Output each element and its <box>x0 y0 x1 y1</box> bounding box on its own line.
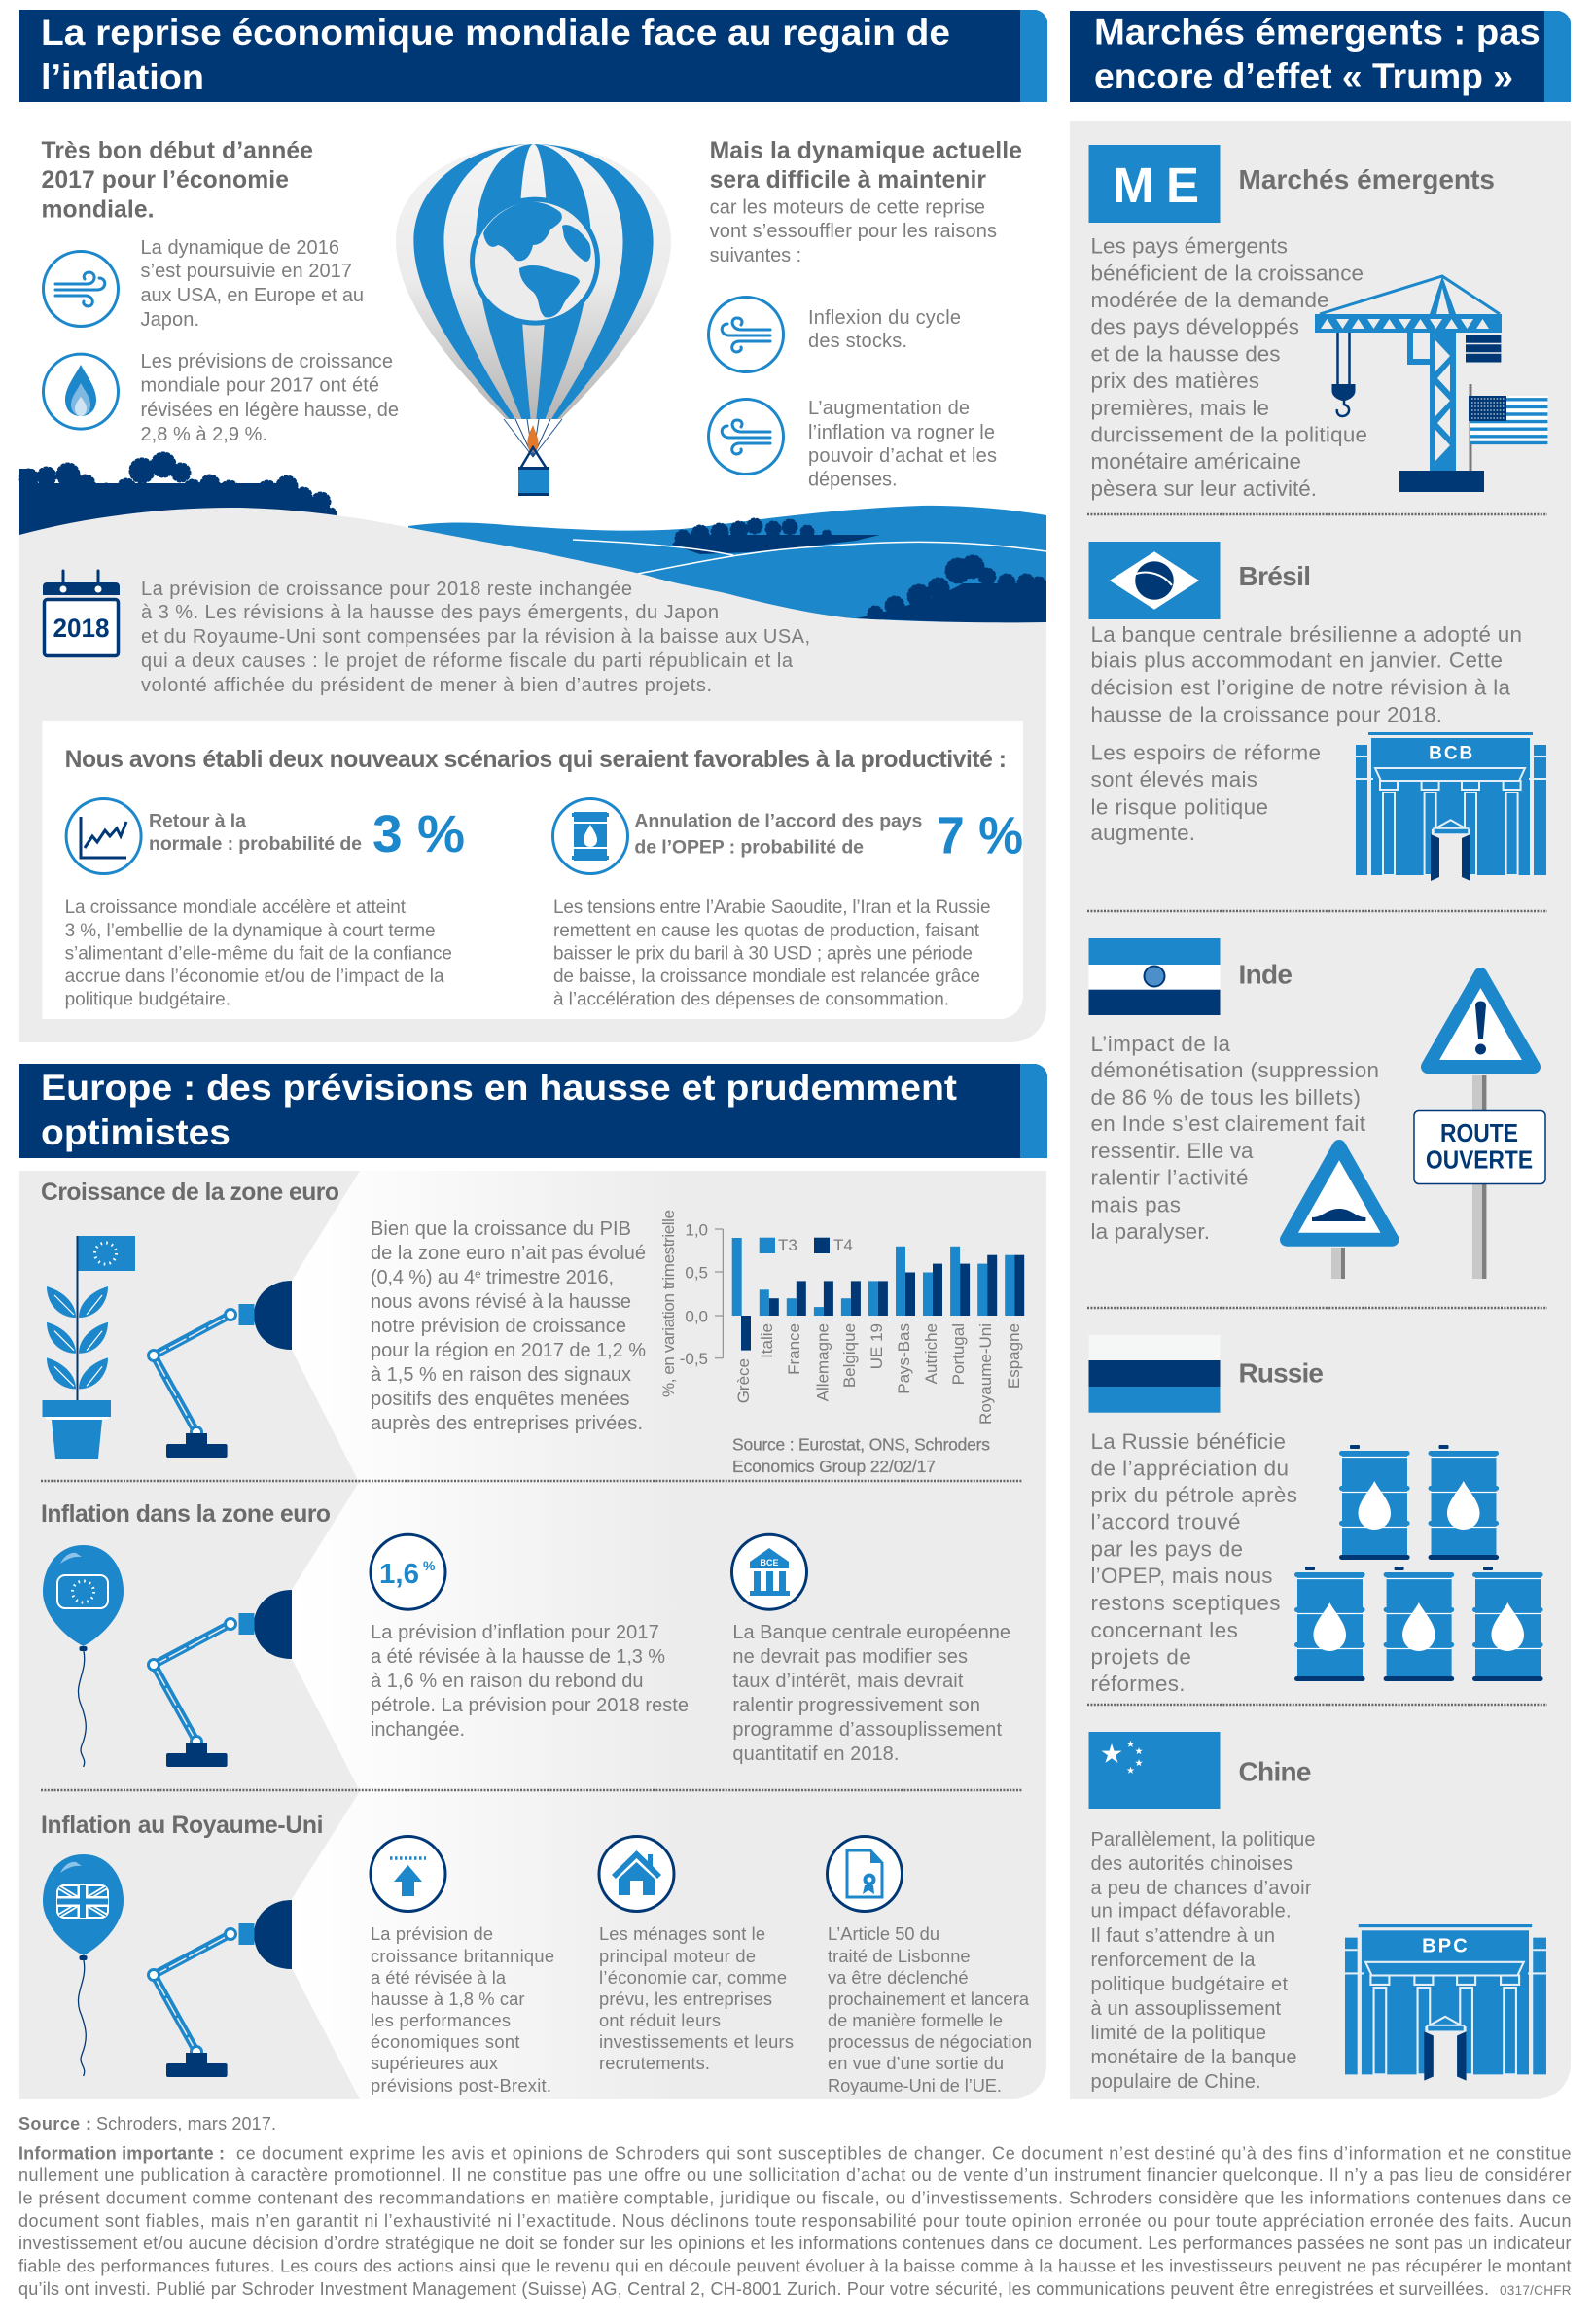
text: pays émergents: prix des matières <box>1091 369 1259 393</box>
text: banque centrale européenne: ralentir progressivement son <box>732 1695 980 1716</box>
sign: warning and route ouverte: OUVERTE <box>1426 1145 1533 1175</box>
text: ménages: l’économie car, comme <box>599 1967 787 1988</box>
heading: mais la dynamique actuelle: vont s’essouffler pour les raisons <box>710 221 997 242</box>
text: inflexion du cycle: des stocks. <box>808 331 907 352</box>
text: banque centrale européenne: quantitatif en 2018. <box>732 1743 899 1765</box>
text: pays émergents: modérée de la demande <box>1091 288 1328 312</box>
text: pays émergents: premières, mais le <box>1091 396 1269 420</box>
text: Chine: populaire de Chine. <box>1091 2071 1260 2093</box>
text: retour à la normale <box>149 811 362 855</box>
text: Chine <box>1091 1829 1315 2093</box>
text: prévision d'inflation: pétrole. La prévision pour 2018 reste <box>371 1695 689 1716</box>
text: Russie: projets de <box>1091 1645 1191 1670</box>
bar chart: croissance T3 T4: T3 <box>778 1236 797 1254</box>
text: ménages: ont réduit leurs <box>599 2010 721 2030</box>
text: prévisions de croissance: mondiale pour 2017 ont été <box>140 375 379 397</box>
panel: Europe <box>19 1171 1046 2099</box>
flag: Brazil <box>1089 542 1220 619</box>
title banner: Europe <box>19 1064 1047 1158</box>
legal notice <box>18 2144 1572 2299</box>
text: banque centrale brésilienne <box>1091 622 1522 726</box>
icon: wind inflation <box>708 399 784 475</box>
figure: 3 %: 3 % <box>372 805 465 863</box>
bar chart: croissance T3 T4: -0,5 <box>680 1350 708 1368</box>
text: démonétisation: démonétisation (suppression <box>1091 1058 1379 1082</box>
text: pays émergents: pèsera sur leur activité. <box>1091 476 1317 501</box>
text: Russie: l’OPEP, mais nous <box>1091 1564 1272 1588</box>
text: banque centrale européenne: ne devrait pas modifier ses <box>732 1646 968 1668</box>
bar chart: croissance T3 T4: France <box>785 1323 803 1375</box>
icon: central bank BCB: BCB <box>1429 744 1474 764</box>
title banner: Europe: Europe : des prévisions en hausse et prudemment <box>41 1068 957 1108</box>
icon: 1,6 % <box>371 1534 445 1609</box>
heading: mais la dynamique actuelle: sera difficile à maintenir <box>710 167 986 194</box>
heading: inflation zone euro: Inflation dans la zone euro <box>41 1501 331 1528</box>
panel: marchés émergents <box>1070 121 1571 2099</box>
text: dynamique de 2016: La dynamique de 2016 <box>140 237 339 259</box>
text: Russie: restons sceptiques <box>1091 1591 1280 1615</box>
label: Russie: Russie <box>1239 1358 1324 1389</box>
title banner: reprise mondiale <box>19 10 1047 102</box>
intro heading: très bon début d'année: mondiale. <box>41 196 154 224</box>
text: prévisions de croissance: révisées en légère hausse, de <box>140 400 399 421</box>
chart source: Economics Group 22/02/17 <box>732 1457 936 1476</box>
text: Chine: Parallèlement, la politique <box>1091 1829 1315 1850</box>
icon: 1,6 %: % <box>423 1558 436 1573</box>
text: croissance PIB zone euro: e <box>475 1267 481 1281</box>
text: Russie: concernant les <box>1091 1618 1238 1642</box>
text: ménages <box>599 1923 794 2073</box>
icon: central bank BPC <box>1342 1924 1549 2081</box>
icon: BCE temple: BCE <box>760 1558 779 1567</box>
text: prévisions de croissance: Les prévisions de croissance <box>140 351 393 372</box>
text: espoirs de réforme: sont élevés mais <box>1091 767 1257 792</box>
text: Russie: prix du pétrole après <box>1091 1483 1297 1507</box>
bar chart: croissance T3 T4: Italie <box>758 1323 776 1358</box>
text: annulation accord OPEP <box>634 811 923 859</box>
icon: desk lamp <box>148 1590 292 1767</box>
text: Chine: des autorités chinoises <box>1091 1853 1293 1875</box>
text: article 50: traité de Lisbonne <box>828 1946 971 1966</box>
bar chart: croissance T3 T4: Allemagne <box>814 1323 832 1401</box>
legal notice: le présent document comme contenant des recommandations en matière comptable, juridique ou fiscale, ou d’investissements. Schroders considère que les informations contenues dans ce <box>18 2189 1572 2208</box>
text: article 50: de manière formelle le <box>828 2010 1003 2030</box>
icon: house <box>599 1836 674 1912</box>
flag: India <box>1089 938 1220 1015</box>
text: annulation accord OPEP: de l’OPEP : probabilité de <box>634 837 864 859</box>
text: démonétisation: mais pas <box>1091 1193 1181 1217</box>
text: prévision d'inflation: inchangée. <box>371 1719 465 1741</box>
text: prévision 2018: à 3 %. Les révisions à la hausse des pays émergents, du Japon <box>141 602 719 623</box>
text: scénario 1: politique budgétaire. <box>65 990 230 1010</box>
text: prévisions de croissance <box>140 351 399 445</box>
text: pays émergents: des pays développés <box>1091 315 1299 339</box>
text: espoirs de réforme <box>1091 741 1321 845</box>
panel: deux scénarios <box>43 721 1023 1019</box>
bar chart: croissance T3 T4: T4 <box>833 1236 853 1254</box>
icon: central bank BCB <box>1353 732 1549 881</box>
text: prévision 2018: volonté affichée du président de mener à bien d’autres projets. <box>141 675 712 696</box>
text: démonétisation: de 86 % de tous les billets) <box>1091 1085 1361 1109</box>
icon: wind stocks <box>708 298 784 371</box>
icon: crane with US flag <box>1315 276 1547 492</box>
icon: calendar 2018: 2018 <box>53 614 109 643</box>
figure: 7 %: 7 % <box>937 807 1023 865</box>
text: scénario 2: Les tensions entre l’Arabie Saoudite, l’Iran et la Russie <box>553 898 991 918</box>
text: espoirs de réforme: le risque politique <box>1091 795 1268 820</box>
text: retour à la normale: normale : probabilité de <box>149 833 362 855</box>
title banner: marchés émergents <box>1070 11 1571 102</box>
text: croissance PIB zone euro: nous avons révisé à la hausse <box>371 1291 631 1313</box>
heading: scénarios: Nous avons établi deux nouveaux scénarios qui seraient favorables à la productivité : <box>65 747 1007 773</box>
text: dynamique de 2016: aux USA, en Europe et au <box>140 285 364 306</box>
text: pays émergents: monétaire américaine <box>1091 449 1301 474</box>
text: scénario 2 <box>553 898 991 1010</box>
text: article 50: va être déclenché <box>828 1967 969 1988</box>
text: prévision britannique: supérieures aux <box>371 2053 498 2073</box>
text: croissance PIB zone euro: notre prévision de croissance <box>371 1316 626 1337</box>
chart source <box>732 1435 990 1476</box>
text: banque centrale brésilienne: biais plus accommodant en janvier. Cette <box>1091 649 1503 673</box>
text: prévision d'inflation: a été révisée à la hausse de 1,3 % <box>371 1646 665 1668</box>
title banner: marchés émergents: Marchés émergents : pas <box>1094 13 1541 53</box>
text: annulation accord OPEP: Annulation de l’accord des pays <box>634 811 923 832</box>
text: démonétisation: ralentir l’activité <box>1091 1166 1249 1190</box>
tag: ME: M E <box>1113 158 1199 213</box>
icon: BCE temple <box>731 1534 807 1609</box>
text: augmentation de l'inflation: dépenses. <box>808 469 897 490</box>
text: Chine: a peu de chances d’avoir <box>1091 1878 1312 1899</box>
text: prévision britannique: croissance britannique <box>371 1946 554 1966</box>
text: Russie <box>1091 1429 1297 1696</box>
icon: UK balloon <box>43 1854 124 2076</box>
text: pays émergents: bénéficient de la croissance <box>1091 262 1364 286</box>
text: retour à la normale: Retour à la <box>149 811 246 832</box>
bar chart: croissance T3 T4: Portugal <box>949 1323 968 1385</box>
text: ménages: Les ménages sont le <box>599 1923 765 1944</box>
text: article 50: en vue d’une sortie du <box>828 2053 1004 2073</box>
text: croissance PIB zone euro: (0,4 %) au 4 <box>371 1267 475 1288</box>
text: ménages: prévu, les entreprises <box>599 1989 772 2009</box>
text: augmentation de l'inflation: L’augmentation de <box>808 398 970 419</box>
text: démonétisation: en Inde s’est clairement fait <box>1091 1111 1366 1136</box>
legal notice: fiable des performances futures. Les cours des actions ainsi que le revenu qui en découle peuvent évoluer à la baisse comme à la hausse et les investisseurs peuvent ne pas récupérer le montant <box>18 2257 1572 2276</box>
text: Russie: réformes. <box>1091 1672 1185 1696</box>
text: espoirs de réforme: augmente. <box>1091 821 1195 845</box>
icon: calendar 2018 <box>43 571 120 655</box>
heading: mais la dynamique actuelle: suivantes : <box>710 245 801 266</box>
bar chart: croissance T3 T4: Royaume-Uni <box>976 1323 995 1425</box>
flag: Russia <box>1089 1335 1220 1413</box>
heading: mais la dynamique actuelle: car les moteurs de cette reprise <box>710 196 985 218</box>
sign: warning and route ouverte <box>1414 974 1545 1279</box>
text: démonétisation <box>1091 1032 1379 1244</box>
text: scénario 1: accrue dans l’économie et/ou de l’impact de la <box>65 967 444 987</box>
sign: warning and route ouverte: ROUTE <box>1440 1118 1518 1147</box>
bar chart: croissance T3 T4: Espagne <box>1005 1323 1023 1389</box>
bar chart: croissance T3 T4: UE 19 <box>868 1323 886 1369</box>
text: Russie: La Russie bénéficie <box>1091 1429 1286 1454</box>
bar chart: croissance T3 T4: Grèce <box>734 1358 753 1403</box>
text: pays émergents: Les pays émergents <box>1091 234 1288 259</box>
icon: wind <box>43 251 119 327</box>
text: Chine: limité de la politique <box>1091 2023 1266 2044</box>
text: dynamique de 2016: Japon. <box>140 309 199 331</box>
text: augmentation de l'inflation: l’inflation va rogner le <box>808 422 995 443</box>
title banner: reprise mondiale: La reprise économique mondiale face au regain de <box>41 13 950 53</box>
icon: desk lamp <box>148 1900 292 2077</box>
text: scénario 1: s’alimentant d’elle-même du fait de la confiance <box>65 944 452 965</box>
landscape: trees and hills <box>19 453 1052 1042</box>
source <box>18 2114 276 2133</box>
heading: mais la dynamique actuelle <box>710 138 1022 266</box>
source: Source : <box>18 2114 91 2133</box>
text: prévision 2018: et du Royaume-Uni sont compensées par la révision à la baisse aux USA, <box>141 626 810 648</box>
legal notice: 0317/CHFR <box>1500 2283 1572 2298</box>
text: inflexion du cycle: Inflexion du cycle <box>808 307 961 329</box>
text: dynamique de 2016 <box>140 237 364 331</box>
text: banque centrale brésilienne: hausse de la croissance pour 2018. <box>1091 702 1442 726</box>
text: croissance PIB zone euro: auprès des entreprises privées. <box>371 1413 643 1434</box>
flag: China <box>1089 1732 1220 1809</box>
icon: five oil barrels <box>1294 1445 1543 1681</box>
label: marchés émergents: Marchés émergents <box>1239 164 1495 194</box>
bar chart: croissance T3 T4: Pays-Bas <box>895 1323 913 1394</box>
bar chart: croissance T3 T4: 0,0 <box>685 1307 708 1326</box>
text: démonétisation: la paralyser. <box>1091 1219 1210 1244</box>
legal notice: investissement et/ou aucune décision d’ordre stratégique ne doit se fonder sur les opinions et les informations contenues dans ce document. Les performances passées ne sont pas un indicateur <box>18 2234 1572 2253</box>
text: banque centrale européenne: La Banque centrale européenne <box>732 1622 1010 1643</box>
text: article 50: L’Article 50 du <box>828 1923 939 1944</box>
text: augmentation de l'inflation: pouvoir d’achat et les <box>808 445 997 467</box>
text: banque centrale brésilienne: décision est l’origine de notre révision à la <box>1091 676 1511 700</box>
text: croissance PIB zone euro: à 1,5 % en raison des signaux <box>371 1364 631 1386</box>
text: Chine: à un assouplissement <box>1091 1998 1281 2020</box>
text: prévision 2018: La prévision de croissance pour 2018 reste inchangée <box>141 579 632 600</box>
legal notice: ce document exprime les avis et opinions de Schroders qui sont susceptibles de changer. Ce document n’est destiné qu’à des fins d’information et ne constitue <box>236 2144 1572 2164</box>
text: prévisions de croissance: 2,8 % à 2,9 %. <box>140 424 267 445</box>
text: pays émergents: durcissement de la politique <box>1091 423 1367 447</box>
text: scénario 2: remettent en cause les quotas de production, faisant <box>553 921 980 941</box>
heading: inflation Royaume-Uni: Inflation au Royaume-Uni <box>41 1813 323 1839</box>
text: Russie: par les pays de <box>1091 1537 1243 1562</box>
legal notice: nullement une publication à caractère promotionnel. Il ne constitue pas une offre ou une sollicitation d’achat ou de vente d’un instrument financier quelconque. Il n’y a pas lieu de considérer <box>18 2166 1572 2185</box>
text: prévision 2018 <box>141 579 810 696</box>
text: Chine: un impact défavorable. <box>1091 1901 1292 1922</box>
text: démonétisation: ressentir. Elle va <box>1091 1139 1254 1163</box>
intro heading: très bon début d'année: 2017 pour l’économie <box>41 167 289 194</box>
text: article 50: prochainement et lancera <box>828 1989 1030 2009</box>
icon: barrel <box>552 799 628 873</box>
heading: mais la dynamique actuelle: Mais la dynamique actuelle <box>710 138 1022 164</box>
text: Chine: politique budgétaire et <box>1091 1974 1288 1995</box>
text: scénario 1: La croissance mondiale accélère et atteint <box>65 898 407 918</box>
text: pays émergents <box>1091 234 1367 501</box>
text: banque centrale européenne: taux d’intérêt, mais devrait <box>732 1671 964 1692</box>
text: prévision 2018: qui a deux causes : le projet de réforme fiscale du parti républicain et la <box>141 651 794 672</box>
title banner: reprise mondiale: l’inflation <box>41 57 204 97</box>
bar chart: croissance T3 T4: 0,5 <box>685 1264 708 1282</box>
label: Chine: Chine <box>1239 1757 1311 1787</box>
text: prévision britannique: hausse à 1,8 % car <box>371 1989 525 2009</box>
text: scénario 1 <box>65 898 452 1010</box>
sign: speed bump <box>1287 1146 1393 1279</box>
tag: ME <box>1089 145 1220 223</box>
icon: document with seal <box>827 1836 903 1912</box>
text: scénario 2: de baisse, la croissance mondiale est relancée grâce <box>553 967 980 987</box>
bar chart: croissance T3 T4: Belgique <box>840 1323 859 1388</box>
text: espoirs de réforme: Les espoirs de réforme <box>1091 741 1321 765</box>
title banner: marchés émergents: encore d’effet « Trump » <box>1094 56 1513 96</box>
text: Chine: Il faut s’attendre à un <box>1091 1925 1275 1947</box>
text: prévision britannique: a été révisée à la <box>371 1967 507 1988</box>
text: inflexion du cycle <box>808 307 961 352</box>
hot air balloon with globe <box>396 144 671 496</box>
text: ménages: principal moteur de <box>599 1946 756 1966</box>
text: article 50: processus de négociation <box>828 2031 1032 2052</box>
bar chart: croissance T3 T4 <box>659 1210 1024 1425</box>
text: croissance PIB zone euro: Bien que la croissance du PIB <box>371 1218 631 1240</box>
bar chart: croissance T3 T4: Autriche <box>922 1323 940 1384</box>
text: prévision britannique: La prévision de <box>371 1923 493 1944</box>
text: prévision d'inflation: à 1,6 % en raison du rebond du <box>371 1671 644 1692</box>
text: banque centrale brésilienne: La banque centrale brésilienne a adopté un <box>1091 622 1522 647</box>
icon: 1,6 %: 1,6 <box>379 1559 419 1590</box>
icon: flame <box>43 354 119 429</box>
icon: desk lamp <box>148 1281 292 1458</box>
text: prévision britannique <box>371 1923 554 2095</box>
text: pays émergents: et de la hausse des <box>1091 341 1280 366</box>
icon: up arrow <box>371 1836 445 1912</box>
text: augmentation de l'inflation <box>808 398 997 490</box>
text: prévision britannique: les performances <box>371 2010 511 2030</box>
chart source: Source : Eurostat, ONS, Schroders <box>732 1435 990 1455</box>
text: article 50: Royaume-Uni de l’UE. <box>828 2075 1002 2095</box>
text: scénario 1: 3 %, l’embellie de la dynamique à court terme <box>65 921 436 941</box>
label: Inde: Inde <box>1239 960 1293 990</box>
text: prévision britannique: économiques sont <box>371 2031 519 2052</box>
text: croissance PIB zone euro: de la zone euro n’ait pas évolué <box>371 1243 646 1264</box>
text: croissance PIB zone euro: positifs des enquêtes menées <box>371 1389 630 1410</box>
text: démonétisation: L’impact de la <box>1091 1032 1231 1056</box>
text: croissance PIB zone euro: trimestre 2016, <box>481 1267 614 1288</box>
text: scénario 2: baisser le prix du baril à 30 USD ; après une période <box>553 944 973 965</box>
text: croissance PIB zone euro: pour la région en 2017 de 1,2 % <box>371 1340 646 1361</box>
intro heading: très bon début d'année: Très bon début d’année <box>41 138 313 164</box>
icon: plant with EU flag in pot <box>43 1236 135 1459</box>
legal notice: qu’ils ont investi. Publié par Schroder Investment Management (Suisse) AG, Central 2, CH-8001 Zurich. Pour votre sécurité, les communications peuvent être enregistrées et surveillées. <box>18 2279 1489 2299</box>
text: prévision d'inflation: La prévision d’inflation pour 2017 <box>371 1622 659 1643</box>
icon: central bank BPC: BPC <box>1422 1935 1470 1956</box>
text: ménages: investissements et leurs <box>599 2031 794 2052</box>
text: dynamique de 2016: s’est poursuivie en 2017 <box>140 261 352 282</box>
title banner: Europe: optimistes <box>41 1112 230 1152</box>
text: banque centrale européenne: programme d’assouplissement <box>732 1719 1002 1741</box>
text: Russie: de l’appréciation du <box>1091 1457 1289 1481</box>
label: Brésil: Brésil <box>1239 561 1311 591</box>
text: Russie: l’accord trouvé <box>1091 1510 1241 1534</box>
text: scénario 2: à l’accélération des dépenses de consommation. <box>553 990 949 1010</box>
intro heading: très bon début d'année <box>41 138 313 224</box>
icon: line chart <box>66 799 141 873</box>
legal notice: document sont fiables, mais n’en garantit ni l’exhaustivité ni l’exactitude. Nous déclinons toute responsabilité pour toute opinion erronée ou pour toute appréciation erronée des faits. Aucun <box>18 2211 1572 2231</box>
heading: croissance de la zone euro: Croissance de la zone euro <box>41 1180 339 1206</box>
bar chart: croissance T3 T4: 1,0 <box>685 1221 708 1239</box>
text: Chine: renforcement de la <box>1091 1950 1256 1971</box>
text: prévision britannique: prévisions post-Brexit. <box>371 2075 551 2095</box>
text: prévision d'inflation <box>371 1622 689 1741</box>
source: Schroders, mars 2017. <box>96 2114 276 2133</box>
text: banque centrale européenne <box>732 1622 1010 1765</box>
icon: EU balloon <box>43 1545 124 1767</box>
legal notice: Information importante : <box>18 2144 225 2164</box>
text: Chine: monétaire de la banque <box>1091 2047 1297 2068</box>
bar chart: croissance T3 T4: %, en variation trimestrielle <box>659 1210 678 1397</box>
text: article 50 <box>828 1923 1032 2095</box>
text: ménages: recrutements. <box>599 2053 710 2073</box>
text: croissance PIB zone euro <box>371 1218 646 1434</box>
